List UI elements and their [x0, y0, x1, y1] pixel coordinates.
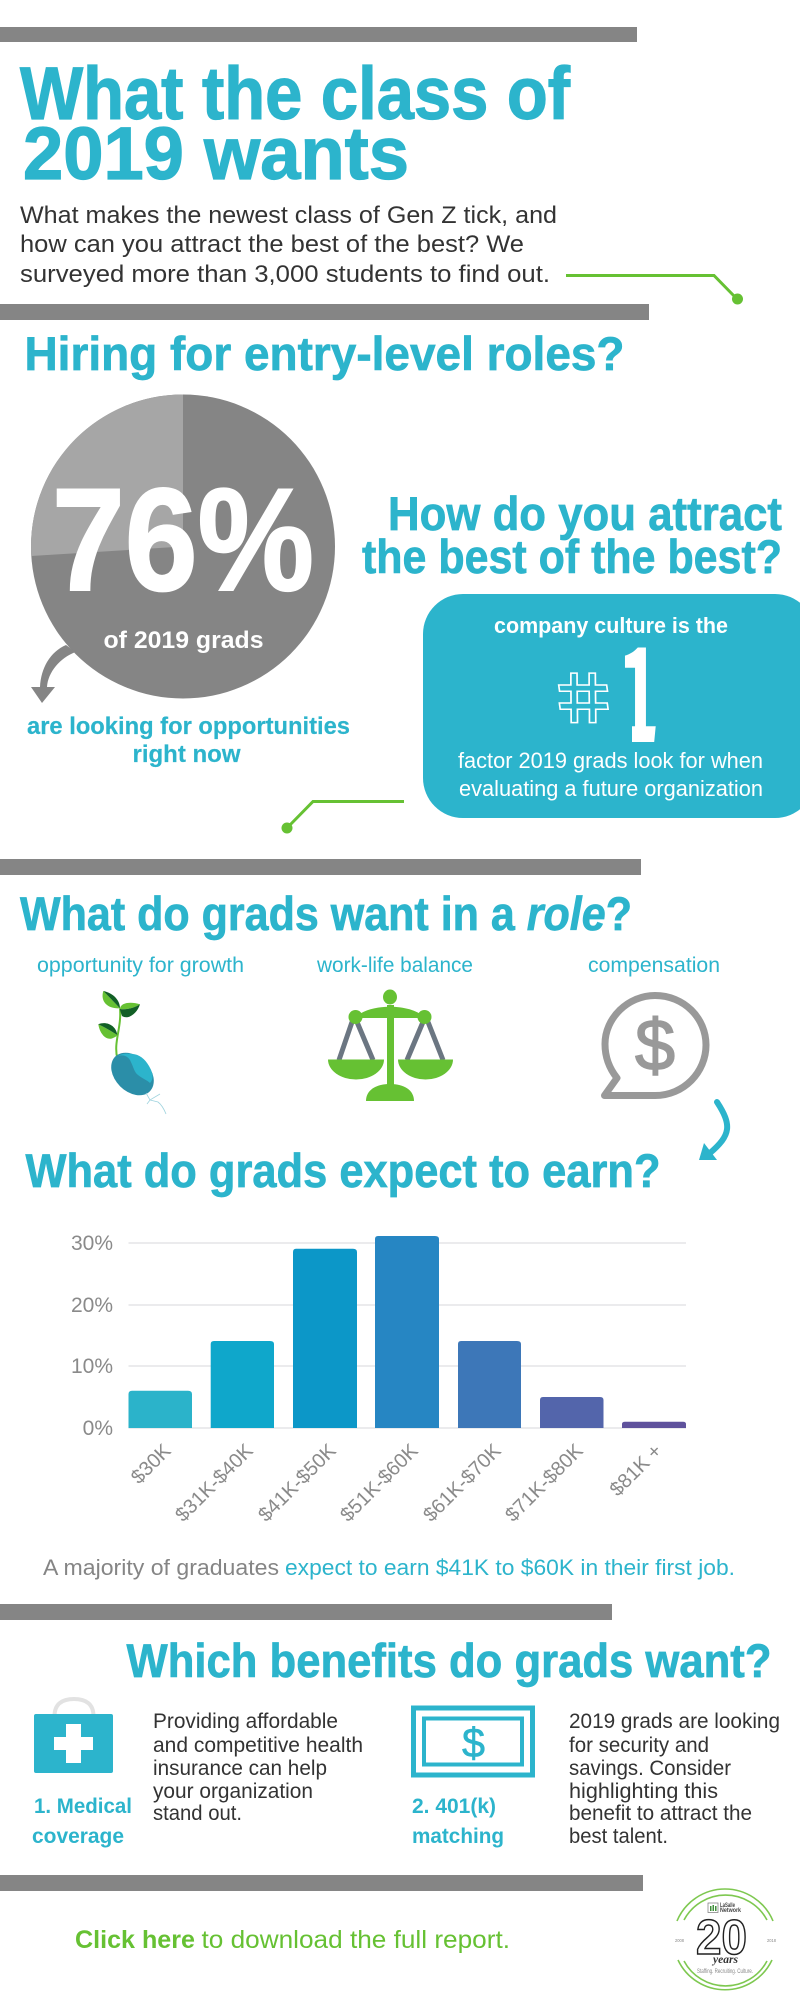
title — [20, 52, 570, 195]
label: 401k matching: matching — [412, 1825, 504, 1848]
intro text: how can you attract the best of the best? We — [20, 231, 524, 258]
heading: hiring: Hiring for entry-level roles? — [24, 327, 624, 380]
text: medical coverage: your organization — [153, 1780, 313, 1803]
logo: LaSalle Network 20 years: Network — [720, 1908, 742, 1914]
icon: number one — [558, 648, 656, 742]
caption: looking for opportunities: right now — [132, 741, 241, 768]
y axis labels: 10% — [71, 1355, 113, 1378]
panel: company culture callout: company culture is the — [494, 613, 728, 638]
caption: looking for opportunities — [27, 713, 350, 768]
panel: company culture callout — [423, 590, 800, 818]
icon: number one: ＃ — [540, 647, 626, 743]
text: 401k matching: for security and — [569, 1734, 709, 1757]
label: medical coverage: 1. Medical — [34, 1795, 132, 1818]
icon: medical kit — [34, 1699, 113, 1773]
y axis labels: 30% — [71, 1232, 113, 1255]
text: medical coverage: insurance can help — [153, 1757, 327, 1780]
intro text: surveyed more than 3,000 students to find out. — [20, 261, 550, 288]
intro text: What makes the newest class of Gen Z tick, and — [20, 202, 557, 229]
logo: LaSalle Network 20 years: years — [711, 1952, 738, 1966]
y axis labels: 20% — [71, 1294, 113, 1317]
logo: LaSalle Network 20 years: 20 — [696, 1911, 747, 1965]
x axis labels: $81K + — [606, 1440, 667, 1501]
logo: LaSalle Network 20 years: 2018 — [767, 1938, 776, 1943]
arrow: to earnings heading — [699, 1102, 727, 1160]
label: medical coverage: coverage — [32, 1825, 124, 1848]
title: 2019 wants — [23, 112, 409, 195]
panel: company culture callout: factor 2019 grads look for when — [458, 748, 763, 773]
logo: LaSalle Network 20 years: 2008 — [675, 1938, 684, 1943]
label: of 2019 grads: of 2019 grads — [104, 627, 264, 654]
x axis labels: $30K — [127, 1440, 176, 1489]
icon: number one: 1 — [617, 590, 661, 780]
text: 401k matching: best talent. — [569, 1825, 668, 1848]
call to action: to download the full report. — [202, 1926, 510, 1954]
text: medical coverage: and competitive health — [153, 1734, 363, 1757]
icon: dollar speech bubble — [604, 996, 706, 1096]
label: compensation: compensation — [588, 954, 720, 977]
x axis labels — [127, 1440, 667, 1526]
label: 401k matching — [412, 1795, 504, 1848]
text: 401k matching: savings. Consider — [569, 1757, 731, 1780]
icon: dollar speech bubble: $ — [635, 1006, 675, 1086]
x axis labels: $61K-$70K — [419, 1440, 506, 1526]
y axis labels — [71, 1232, 113, 1440]
label: 401k matching: 2. 401(k) — [412, 1795, 496, 1818]
heading: attract the best: How do you attract — [388, 487, 782, 540]
y axis labels: 0% — [83, 1417, 113, 1440]
bars — [128, 1236, 686, 1428]
stat: 76%: 76% — [52, 458, 314, 621]
panel: 76 percent pie — [31, 394, 335, 698]
label: work-life balance: work-life balance — [316, 954, 473, 977]
x axis labels: $71K-$80K — [501, 1440, 588, 1526]
call to action — [75, 1926, 510, 1954]
logo: LaSalle Network 20 years — [675, 1889, 776, 1990]
heading: attract the best — [362, 487, 782, 583]
title: What the class of — [20, 52, 570, 135]
caption: looking for opportunities: are looking for opportunities — [27, 713, 350, 740]
x axis labels: $31K-$40K — [171, 1440, 258, 1526]
text: medical coverage — [153, 1710, 363, 1825]
arrow: pie to caption — [31, 645, 76, 703]
panel: company culture callout: evaluating a future organization — [459, 776, 763, 801]
text: medical coverage: stand out. — [153, 1802, 242, 1825]
green connector line middle — [282, 802, 404, 834]
text: medical coverage: Providing affordable — [153, 1710, 338, 1733]
text: 401k matching — [569, 1710, 780, 1848]
bar chart: expected salary — [71, 1232, 686, 1526]
icon: money bill — [414, 1708, 532, 1775]
chart caption: expect to earn $41K to $60K in their first job. — [285, 1555, 735, 1580]
heading: role: What do grads want in a role? — [20, 887, 632, 940]
text: 401k matching: highlighting this — [569, 1780, 718, 1803]
chart caption — [43, 1555, 735, 1580]
icon: balance scale — [328, 990, 453, 1101]
x axis labels: $51K-$60K — [336, 1440, 423, 1526]
x axis labels: $41K-$50K — [254, 1440, 341, 1526]
icon: sprout — [98, 991, 166, 1114]
heading: expect to earn: What do grads expect to earn? — [26, 1144, 660, 1197]
logo: LaSalle Network 20 years: Staffing. Recruiting. Culture. — [697, 1969, 753, 1975]
green connector line top — [566, 276, 743, 304]
call to action: Click here — [75, 1926, 195, 1954]
intro text — [20, 202, 557, 288]
text: 401k matching: 2019 grads are looking — [569, 1710, 780, 1733]
label: medical coverage — [32, 1795, 132, 1848]
label: opportunity for growth: opportunity for growth — [37, 954, 244, 977]
icon: money bill: $ — [462, 1719, 485, 1766]
logo: LaSalle Network 20 years: LaSalle — [720, 1903, 735, 1909]
text: 401k matching: benefit to attract the — [569, 1802, 752, 1825]
chart caption: A majority of graduates — [43, 1555, 279, 1580]
